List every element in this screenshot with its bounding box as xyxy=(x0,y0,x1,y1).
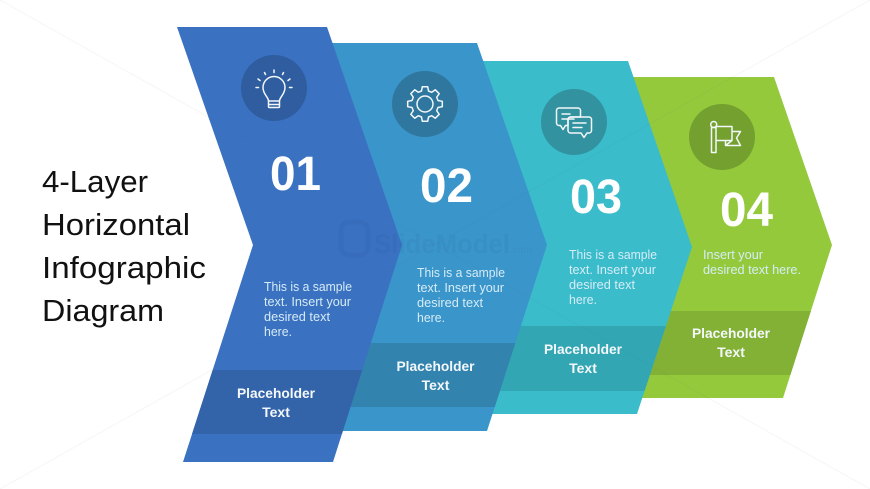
layer 01 body text: This is a sample xyxy=(264,279,352,294)
panel: layer 02 xyxy=(327,43,550,431)
layer 03 arrow shape xyxy=(478,61,692,414)
layer 04 label band xyxy=(650,311,811,375)
icon: light bulb xyxy=(241,55,307,121)
layer 04 label: Text xyxy=(717,344,745,360)
watermark: .com xyxy=(510,245,532,256)
layer 01 arrow shape xyxy=(177,27,402,462)
layer 03 body text: here. xyxy=(569,292,597,307)
title: Diagram xyxy=(42,293,164,328)
layer 03 body text: text. Insert your xyxy=(569,262,657,277)
watermark: SlideModel xyxy=(374,229,510,259)
icon: gear xyxy=(392,71,458,137)
layer 03 label band xyxy=(500,326,666,391)
number 03: 03 xyxy=(570,171,622,224)
layer 01 label: Placeholder xyxy=(237,385,316,401)
layer 01 body text: text. Insert your xyxy=(264,294,352,309)
title xyxy=(42,164,206,328)
layer 01 label xyxy=(237,385,316,420)
layer 02 label: Text xyxy=(422,377,450,393)
icon: chat bubbles xyxy=(541,89,607,155)
layer 03 body text: This is a sample xyxy=(569,247,657,262)
layer 02 body text: text. Insert your xyxy=(417,280,505,295)
layer 01 body text: here. xyxy=(264,324,292,339)
layer 04 body text xyxy=(703,247,801,277)
layer 04 body text: desired text here. xyxy=(703,262,801,277)
layer 01 label: Text xyxy=(262,404,290,420)
number 02: 02 xyxy=(420,160,473,213)
title: 4-Layer xyxy=(42,164,148,199)
layer 02 body text xyxy=(417,265,505,325)
title: Infographic xyxy=(42,250,206,285)
layer 02 label band xyxy=(350,343,516,407)
layer 02 body text: desired text xyxy=(417,295,483,310)
layer 04 body text: Insert your xyxy=(703,247,764,262)
number 04: 04 xyxy=(720,184,773,237)
layer 04 label: Placeholder xyxy=(692,325,771,341)
layer 03 label: Placeholder xyxy=(544,341,623,357)
layer 02 arrow shape xyxy=(327,43,547,431)
number 01: 01 xyxy=(270,148,321,201)
layer 01 body text xyxy=(264,279,352,339)
layer 02 label: Placeholder xyxy=(396,358,475,374)
panel: layer 04 xyxy=(620,77,835,398)
panel: layer 03 xyxy=(478,61,695,414)
layer 03 body text: desired text xyxy=(569,277,635,292)
layer 04 label xyxy=(692,325,771,360)
panel: layer 01 xyxy=(177,27,402,462)
layer 03 label: Text xyxy=(569,360,597,376)
icon: flag xyxy=(689,104,755,170)
watermark xyxy=(341,222,532,259)
layer 02 body text: here. xyxy=(417,310,445,325)
title: Horizontal xyxy=(42,207,190,242)
layer 02 label xyxy=(396,358,475,393)
layer 03 body text xyxy=(569,247,657,307)
layer 03 label xyxy=(544,341,623,376)
layer 01 label band xyxy=(192,370,362,434)
layer 02 body text: This is a sample xyxy=(417,265,505,280)
layer 04 arrow shape xyxy=(624,77,832,398)
layer 01 body text: desired text xyxy=(264,309,330,324)
